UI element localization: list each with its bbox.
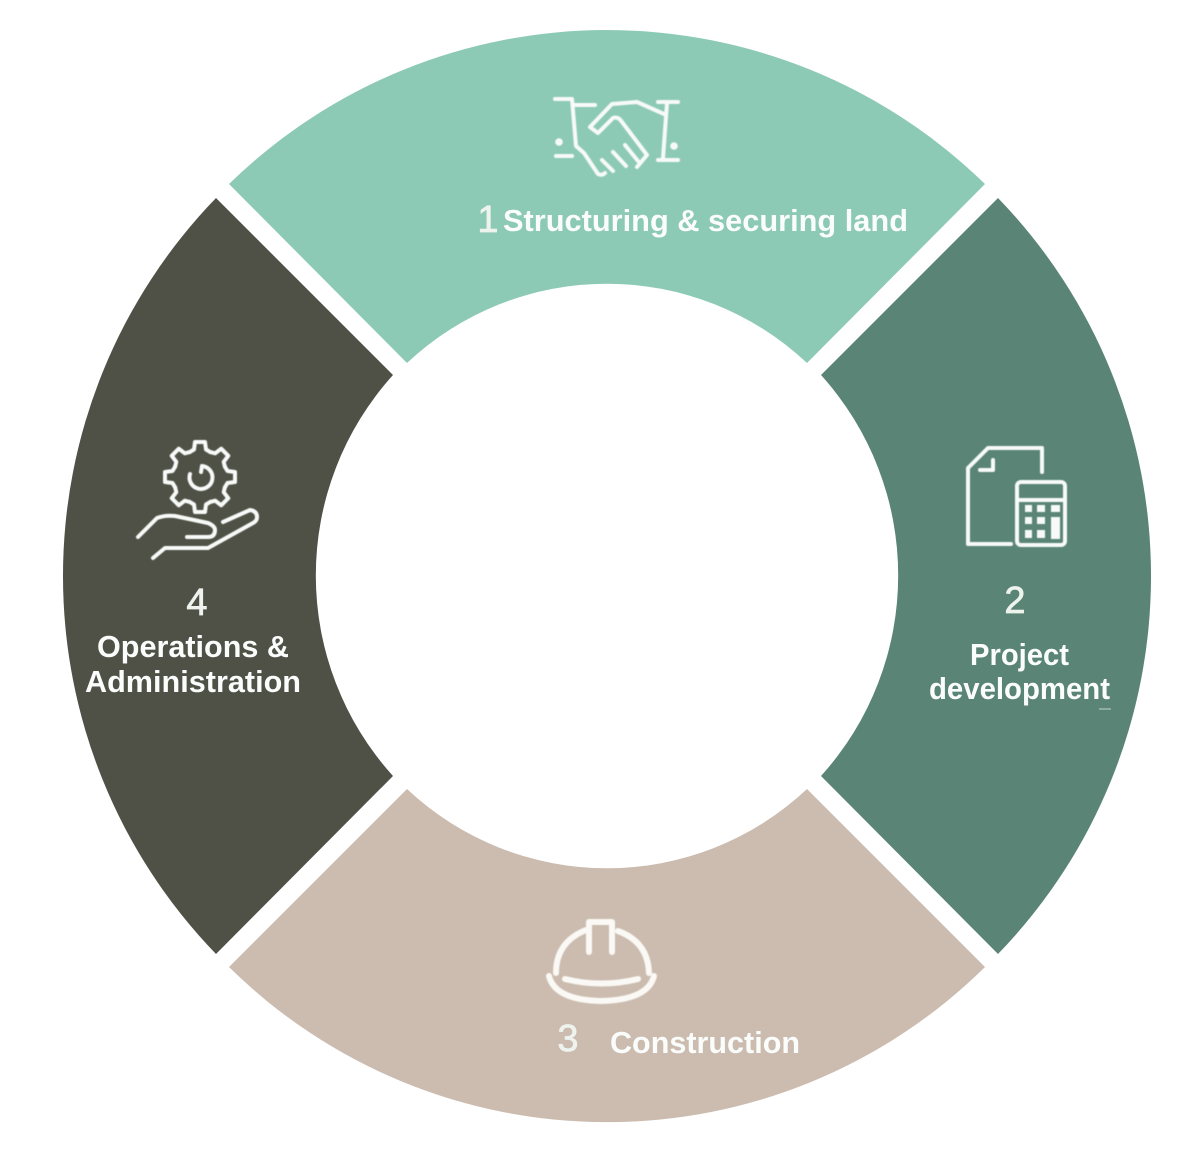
number 2: 2 bbox=[1004, 580, 1026, 622]
segment: step 2 bbox=[821, 198, 1151, 954]
heading: operations and administration: Operations & bbox=[97, 629, 289, 664]
heading: project development bbox=[929, 637, 1110, 706]
number 4: 4 bbox=[186, 582, 208, 624]
segment: step 4 bbox=[63, 198, 393, 954]
icon: handshake bbox=[555, 99, 678, 175]
heading: operations and administration: Administration bbox=[85, 664, 301, 699]
number 3: 3 bbox=[557, 1018, 579, 1060]
segment: step 3 bbox=[229, 789, 985, 1122]
icon: gear over hand bbox=[138, 442, 257, 558]
panel: step 3 construction bbox=[229, 789, 985, 1122]
number 1: 1 bbox=[477, 199, 499, 241]
icon: hard hat bbox=[549, 922, 654, 1001]
heading: operations and administration bbox=[85, 629, 301, 699]
panel: step 1 structuring and securing land bbox=[229, 30, 985, 363]
heading: project development: Project bbox=[970, 637, 1069, 672]
heading: structuring and securing land: Structuring & securing land bbox=[503, 203, 908, 238]
heading: construction: Construction bbox=[610, 1025, 800, 1060]
panel: step 2 project development bbox=[821, 198, 1151, 954]
heading: project development: development bbox=[929, 671, 1110, 706]
panel: step 4 operations and administration bbox=[63, 198, 393, 954]
segment: step 1 bbox=[229, 30, 985, 363]
icon: document and calculator bbox=[968, 448, 1065, 545]
